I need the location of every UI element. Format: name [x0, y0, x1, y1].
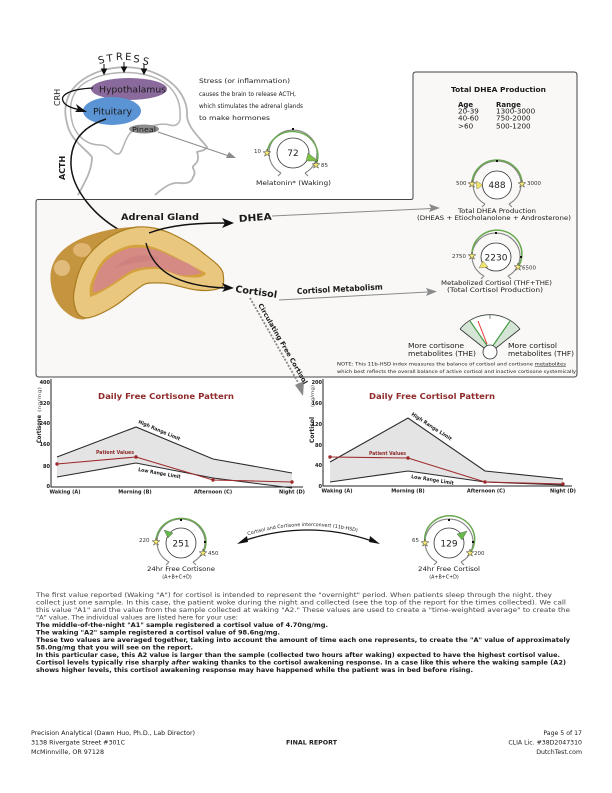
text block: explanation: this value "A1" and the value from the sample collected at waking "A2." These values are used to create a "time-weighted average" to create the: [36, 607, 570, 614]
table: total DHEA production: 1300-3000: [496, 106, 536, 116]
text block: explanation: The first value reported (Waking "A") for cortisol is intended to represent the "overnight" period. When patients sleep through the night, they: [35, 592, 552, 599]
illustration: adrenal gland: [50, 227, 224, 320]
arrow: circulating free cortisol: [250, 298, 304, 396]
chart: daily free cortisone pattern: Night (D): [279, 490, 305, 496]
pituitary: Pituitary: [93, 108, 132, 118]
axes: [51, 379, 303, 487]
label: more cortisol metabolites: metabolites (THF): [508, 350, 574, 358]
text: stress explanation: causes the brain to release ACTH,: [199, 90, 296, 98]
note: 11b-HSD index: which best reflects the overall balance of active cortisol and inactive cortisone systemically: [337, 369, 576, 375]
label: ACTH: ACTH: [58, 156, 67, 180]
chart: daily free cortisone pattern: Cortisone: [36, 415, 43, 443]
table: total DHEA production: 40-60: [458, 114, 479, 122]
note: 11b-HSD index: [337, 362, 576, 375]
label: cortisol: Cortisol: [235, 284, 278, 301]
gauge: 24hr free cortisone: 220: [139, 538, 150, 544]
text block: explanation: The middle-of-the-night "A1" sample registered a cortisol value of 4.70ng/mg.: [36, 622, 328, 629]
label: more cortisol metabolites: [508, 342, 574, 358]
gauge: total DHEA production: 3000: [527, 181, 541, 187]
gauge: 24hr free cortisone: [139, 518, 219, 565]
gauge: total DHEA production: 488: [488, 181, 506, 191]
arrow: gland to cortisol: [146, 243, 234, 292]
chart: daily free cortisol pattern: High Range Limit: [410, 412, 453, 443]
gauge: metabolized cortisol: 2750: [452, 254, 466, 260]
table: total DHEA production: [451, 86, 546, 130]
footer: page and licence: CLIA Lic. #38D2047310: [508, 740, 582, 746]
caption: 24hr free cortisol: (A+B+C+D): [429, 574, 459, 580]
chart: daily free cortisone pattern: 80: [43, 464, 51, 470]
chart: daily free cortisol pattern: Night (D): [550, 488, 576, 494]
pineal: [129, 124, 159, 134]
chart: daily free cortisone pattern: Low Range Limit: [138, 467, 182, 481]
note: 11b-HSD index: NOTE: This 11b-HSD index measures the balance of cortisol and cortisone metabolites: [337, 362, 567, 368]
chart: daily free cortisol pattern: Afternoon (C): [467, 488, 505, 494]
label: more cortisone metabolites: [408, 342, 476, 358]
arrow: pineal to melatonin: [158, 132, 236, 158]
table: total DHEA production: Age: [458, 101, 473, 109]
label: adrenal gland: Adrenal Gland: [121, 213, 199, 223]
text: stress explanation: to make hormones: [199, 114, 271, 122]
chart: daily free cortisone pattern: 400: [40, 380, 51, 386]
hypothalamus: [91, 78, 167, 100]
gauge: melatonin: 85: [321, 163, 328, 169]
panel: adrenal background: [36, 72, 577, 377]
label: more cortisone metabolites: More cortisone: [408, 342, 464, 350]
footer: final report: FINAL REPORT: [286, 740, 338, 746]
caption: 24hr free cortisone: 24hr Free Cortisone: [147, 565, 215, 573]
gauge: metabolized cortisol: 2230: [485, 254, 508, 264]
gauge: melatonin: 10: [254, 149, 261, 155]
caption: metabolized cortisol: (Total Cortisol Production): [447, 287, 543, 294]
arrow: CRH: [62, 88, 93, 112]
caption: 24hr free cortisol: [418, 565, 480, 580]
table: total DHEA production: >60: [458, 122, 474, 130]
text block: explanation: collect just one sample. In this case, the patient woke during the night and collected (see the top of the report for the times collected). We call: [36, 600, 566, 606]
arrow: interconversion: [237, 522, 380, 544]
chart: daily free cortisone pattern: 320: [40, 401, 51, 407]
footer: page and licence: Page 5 of 17: [543, 730, 582, 737]
text block: explanation: The waking "A2" sample registered a cortisol value of 98.6ng/mg.: [36, 630, 280, 636]
table: total DHEA production: Range: [496, 101, 521, 109]
chart title: Daily Free Cortisone Pattern: [98, 392, 234, 401]
gauge: 24hr free cortisol: 129: [440, 540, 458, 550]
chart: daily free cortisol pattern: 0: [319, 484, 323, 490]
hypothalamus: Hypothalamus: [99, 86, 166, 96]
chart: daily free cortisone pattern: (ng/mg): [37, 387, 43, 412]
chart: daily free cortisol pattern: Waking (A): [321, 488, 353, 494]
chart: daily free cortisone pattern: Morning (B): [118, 490, 152, 496]
arrow: gland to DHEA: [149, 218, 234, 233]
caption: metabolized cortisol: Metabolized Cortisol (THF+THE): [441, 280, 552, 287]
arrow: cortisol metabolism: [279, 288, 437, 300]
stress arrows: [102, 62, 146, 74]
chart: daily free cortisone pattern: High Range Limit: [137, 419, 181, 443]
gauge: melatonin: [254, 128, 331, 187]
chart: daily free cortisone pattern: 160: [40, 442, 51, 448]
chart: daily free cortisol pattern: Patient Values: [369, 451, 406, 457]
footer: lab address: 3138 Rivergate Street #301C: [31, 740, 125, 746]
text block: explanation: shows higher levels, this cortisol awakening response may have happened while the patient was in bed before rising.: [36, 667, 473, 674]
label: DHEA: DHEA: [238, 212, 273, 225]
chart: daily free cortisol pattern: 40: [315, 463, 323, 469]
patient values: [328, 455, 565, 486]
chart: daily free cortisol pattern: 80: [315, 443, 323, 449]
chart: daily free cortisol pattern: (ng/mg): [310, 385, 316, 407]
chart: daily free cortisol pattern: Morning (B): [391, 488, 425, 494]
caption: total DHEA production: (DHEAS + Etiocholanolone + Androsterone): [417, 215, 571, 222]
gauge: 24hr free cortisone: 251: [172, 540, 190, 550]
text block: explanation: Cortisol levels typically rise sharply after waking thanks to the cortisol awakening response. In a case like this where the waking sample (A2): [36, 658, 566, 666]
pineal: Pineal: [132, 126, 156, 134]
illustration: head and brain: [65, 52, 207, 195]
chart: daily free cortisone pattern: [36, 379, 305, 496]
chart: daily free cortisol pattern: Cortisol: [309, 417, 316, 443]
arrow: DHEA to production: [272, 204, 440, 216]
text: stress explanation: [199, 77, 304, 122]
text: stress explanation: Stress (or inflammation): [199, 77, 290, 85]
gauge: 24hr free cortisol: 65: [412, 538, 419, 544]
text block: explanation: In this particular case, this A2 value is larger than the sample (collected two hours after waking) expected to have the highest cortisol value.: [36, 652, 560, 659]
label: more cortisone metabolites: metabolites (THE): [408, 350, 476, 358]
caption: 24hr free cortisone: (A+B+C+D): [162, 574, 192, 580]
footer: lab address: McMinnville, OR 97128: [31, 749, 104, 756]
chart: daily free cortisol pattern: 160: [312, 401, 323, 407]
range band: [330, 418, 563, 485]
stress heading: STRESS: [97, 52, 150, 68]
label: CRH: CRH: [53, 89, 62, 106]
chart: daily free cortisone pattern: 0: [47, 484, 51, 490]
label: more cortisol metabolites: More cortisol: [508, 342, 557, 350]
gauge: 24hr free cortisol: 200: [474, 551, 485, 557]
gauge: 24hr free cortisone: 450: [208, 551, 219, 557]
footer: page and licence: [508, 730, 582, 756]
gauge: 24hr free cortisol: [412, 516, 485, 565]
caption: total DHEA production: Total DHEA Production: [457, 208, 536, 215]
caption: metabolized cortisol: [441, 280, 552, 294]
text block: explanation: These two values are averaged together, taking into account the amount of time each one represents, to create the "A" value of approximately: [36, 637, 570, 644]
caption: total DHEA production: [417, 208, 571, 222]
chart title: Daily Free Cortisol Pattern: [369, 392, 495, 401]
chart: daily free cortisol pattern: 200: [312, 380, 323, 386]
table: total DHEA production: Total DHEA Production: [451, 86, 546, 94]
footer: lab address: [31, 730, 195, 756]
table: total DHEA production: 500-1200: [496, 122, 531, 130]
chart: 11b-HSD index fan: [460, 315, 520, 359]
gauge: metabolized cortisol: [452, 230, 536, 279]
footer: lab address: Precision Analytical (Dawn Huo, Ph.D., Lab Director): [31, 730, 195, 737]
footer: page and licence: DutchTest.com: [536, 749, 582, 756]
chart: daily free cortisol pattern: 120: [312, 422, 323, 428]
chart: daily free cortisone pattern: 240: [40, 421, 51, 427]
text block: explanation: "A" value. The individual values are listed here for your use:: [36, 614, 238, 622]
gauge: melatonin: Melatonin* (Waking): [256, 180, 331, 187]
gauge: metabolized cortisol: 6500: [522, 266, 536, 272]
pituitary: [83, 97, 141, 125]
gauge: total DHEA production: [456, 160, 541, 207]
chart: daily free cortisone pattern: Afternoon (C): [194, 490, 232, 496]
table: total DHEA production: 750-2000: [496, 114, 531, 122]
text block: explanation: 58.0ng/mg that you will see on the report.: [36, 644, 193, 652]
range band: [57, 427, 292, 488]
caption: 24hr free cortisol: 24hr Free Cortisol: [418, 565, 480, 573]
patient values: [55, 455, 294, 484]
chart: daily free cortisol pattern: Low Range Limit: [411, 474, 455, 487]
arrow: interconversion: Cortisol and Cortisone interconvert (11b-HSD): [248, 522, 358, 535]
axes: [323, 379, 572, 486]
text block: explanation: [35, 592, 570, 674]
label: cortisol metabolism: Cortisol Metabolism: [297, 283, 383, 296]
table: total DHEA production: 20-39: [458, 106, 479, 116]
arrow: ACTH: [71, 119, 136, 239]
chart: daily free cortisol pattern: [309, 379, 576, 494]
chart: daily free cortisone pattern: Patient Values: [96, 450, 134, 456]
chart: daily free cortisone pattern: Waking (A): [49, 490, 81, 496]
label: circulating free cortisol: Circulating Free Cortisol: [256, 302, 309, 386]
gauge: melatonin: 72: [287, 149, 299, 159]
caption: 24hr free cortisone: [147, 565, 215, 580]
gauge: total DHEA production: 500: [456, 181, 467, 187]
text: stress explanation: which stimulates the adrenal glands: [199, 102, 304, 110]
